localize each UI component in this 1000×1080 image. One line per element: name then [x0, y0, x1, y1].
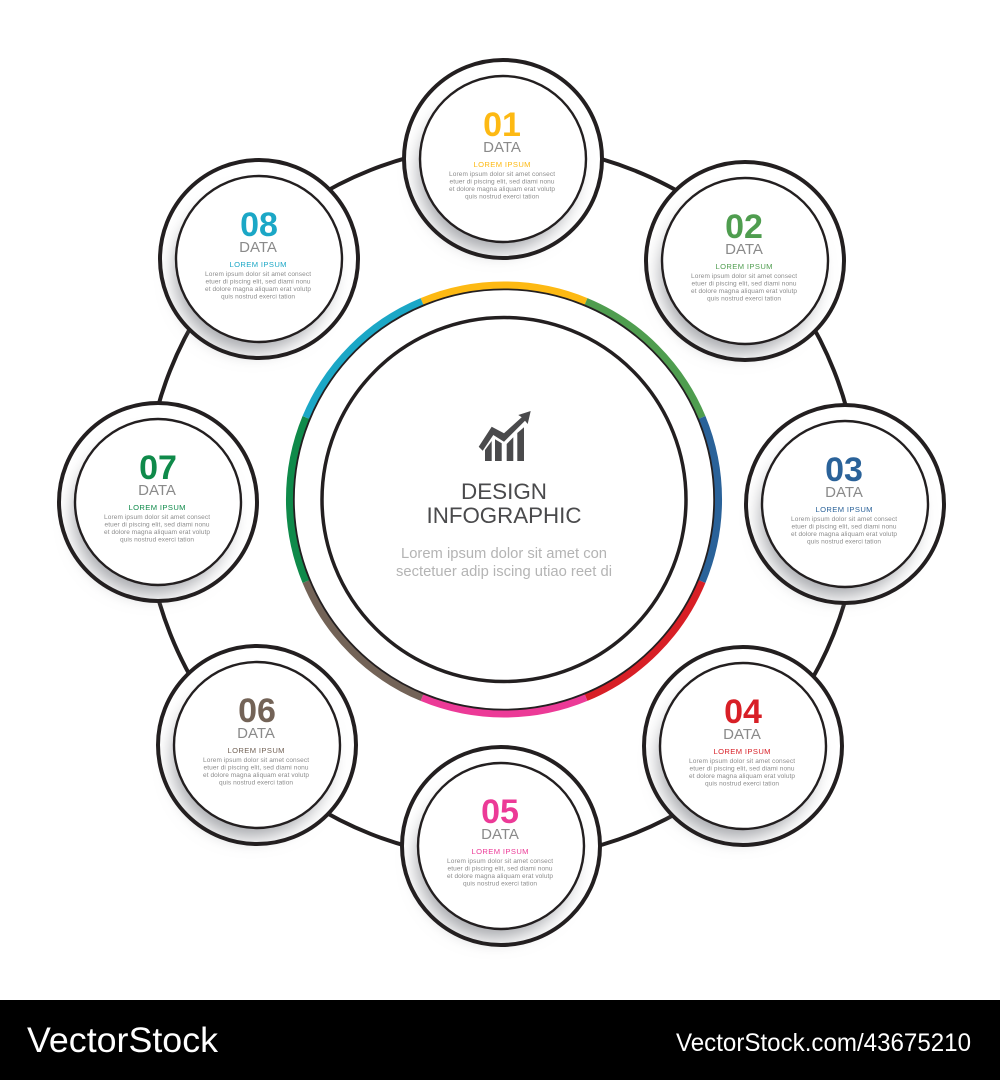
node 07: et dolore magna aliquam erat volutp	[104, 529, 210, 536]
node 06	[158, 646, 356, 844]
node 01	[404, 60, 602, 258]
node 04: 04	[724, 693, 762, 731]
node 06: quis nostrud exerci tation	[219, 780, 293, 786]
title: DESIGN	[461, 479, 547, 504]
footer brand: VectorStock	[27, 1021, 219, 1060]
node 08: Lorem ipsum dolor sit amet consect	[205, 271, 311, 278]
node 04	[644, 647, 842, 845]
node 04: quis nostrud exerci tation	[705, 780, 779, 788]
node 01: Lorem ipsum dolor sit amet consect	[449, 171, 555, 178]
node 04: LOREM IPSUM	[714, 747, 770, 756]
title: INFOGRAPHIC	[426, 503, 582, 528]
black ring under colours	[294, 289, 714, 710]
node 05: 05	[481, 793, 519, 831]
icon: rising chart with arrow	[479, 411, 531, 461]
node 08: et dolore magna aliquam erat volutp	[205, 286, 311, 293]
node 05: quis nostrud exerci tation	[463, 880, 537, 888]
node 08: DATA	[239, 239, 277, 256]
node 06: DATA	[237, 725, 275, 742]
node 08: etuer di piscing elit, sed diami nonu	[206, 278, 311, 286]
node 07	[59, 403, 257, 601]
node 05: LOREM IPSUM	[472, 847, 528, 856]
node 01: quis nostrud exerci tation	[465, 194, 539, 200]
node 04: Lorem ipsum dolor sit amet consect	[689, 758, 795, 765]
node 07: LOREM IPSUM	[128, 503, 186, 512]
node 07: quis nostrud exerci tation	[120, 536, 194, 544]
node 03: quis nostrud exerci tation	[807, 538, 881, 546]
node 04: etuer di piscing elit, sed diami nonu	[690, 766, 795, 772]
node 07: Lorem ipsum dolor sit amet consect	[104, 514, 210, 521]
node 07: DATA	[138, 482, 176, 499]
title	[426, 479, 582, 528]
node 08: quis nostrud exerci tation	[221, 294, 295, 300]
node 05: DATA	[481, 826, 519, 843]
node 02: quis nostrud exerci tation	[707, 296, 781, 302]
node 02: LOREM IPSUM	[716, 262, 772, 271]
node 02: 02	[725, 208, 763, 246]
node 02: et dolore magna aliquam erat volutp	[691, 288, 797, 295]
node 05	[402, 747, 600, 945]
node 03: et dolore magna aliquam erat volutp	[791, 531, 897, 538]
footer url: VectorStock.com/43675210	[676, 1029, 971, 1057]
node 01: DATA	[483, 139, 521, 156]
node 02: DATA	[725, 241, 763, 258]
node 08	[160, 160, 358, 358]
node 06: 06	[238, 692, 276, 730]
node 06: Lorem ipsum dolor sit amet consect	[203, 757, 309, 764]
node 03: 03	[825, 451, 863, 489]
node 02: etuer di piscing elit, sed diami nonu	[692, 280, 797, 288]
subtitle	[396, 546, 612, 580]
node 02: Lorem ipsum dolor sit amet consect	[691, 273, 797, 280]
node 06: etuer di piscing elit, sed diami nonu	[204, 764, 309, 772]
node 01: et dolore magna aliquam erat volutp	[449, 186, 555, 193]
node 05: et dolore magna aliquam erat volutp	[447, 873, 553, 880]
node 04: DATA	[723, 726, 761, 743]
inner hub circle	[322, 318, 686, 682]
node 08: LOREM IPSUM	[230, 260, 286, 269]
subtitle: Lorem ipsum dolor sit amet con	[401, 546, 607, 562]
subtitle: sectetuer adip iscing utiao reet di	[396, 564, 612, 580]
node 01: 01	[483, 106, 521, 144]
node 02	[646, 162, 844, 360]
node 06: LOREM IPSUM	[228, 746, 284, 755]
node 03: etuer di piscing elit, sed diami nonu	[792, 524, 897, 530]
outer connecting ring	[145, 145, 859, 859]
node 01: etuer di piscing elit, sed diami nonu	[450, 178, 555, 186]
node 07: 07	[139, 449, 177, 487]
node 08: 08	[240, 206, 278, 244]
node 03: Lorem ipsum dolor sit amet consect	[791, 516, 897, 523]
node 05: Lorem ipsum dolor sit amet consect	[447, 858, 553, 865]
node 04: et dolore magna aliquam erat volutp	[689, 773, 795, 780]
node 03: LOREM IPSUM	[816, 505, 872, 514]
footer bar	[0, 1000, 1000, 1080]
node 01: LOREM IPSUM	[474, 160, 530, 169]
node 07: etuer di piscing elit, sed diami nonu	[104, 522, 210, 528]
node 03	[746, 405, 944, 603]
central hub	[289, 285, 719, 714]
node 03: DATA	[825, 484, 863, 501]
node 06: et dolore magna aliquam erat volutp	[203, 772, 309, 779]
segmented colour ring	[289, 285, 719, 714]
node 05: etuer di piscing elit, sed diami nonu	[448, 866, 553, 872]
